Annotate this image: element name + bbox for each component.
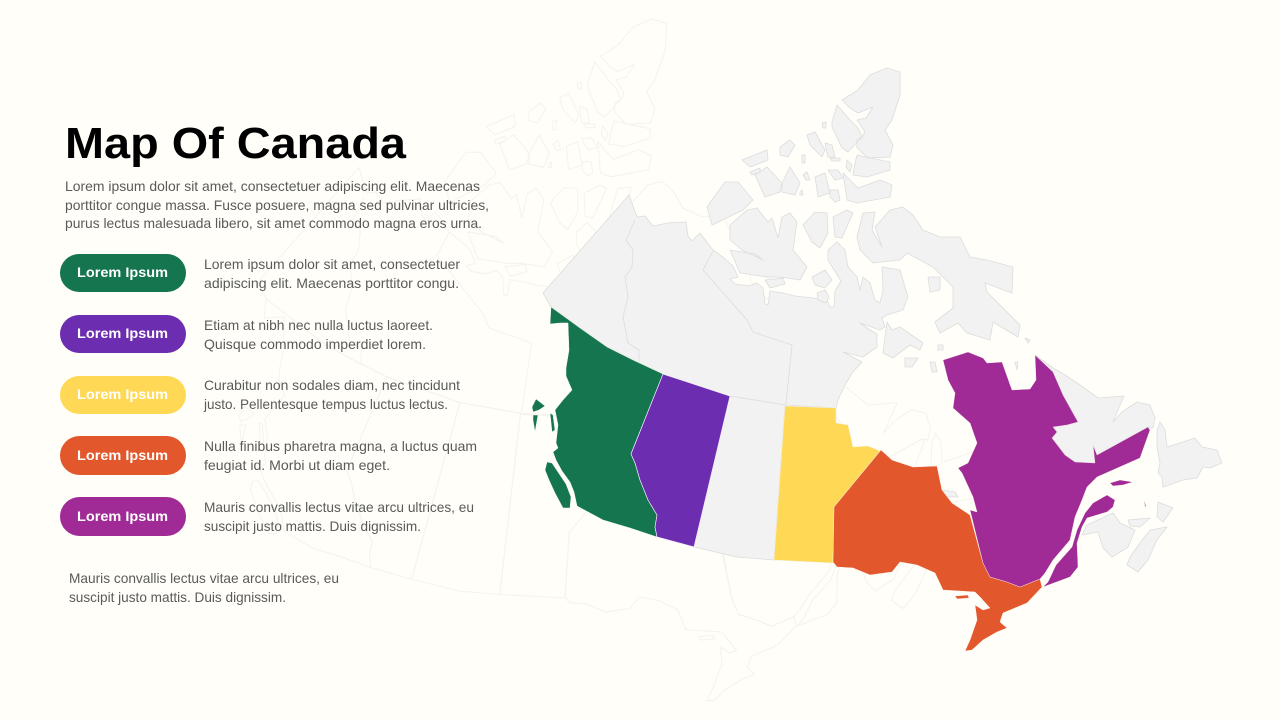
row 1: green pill and text: Lorem Ipsum: [77, 265, 168, 280]
northern territories and Arctic islands: [543, 68, 1030, 497]
title: Map Of Canada: [65, 119, 407, 168]
row 4: orange pill and text: feugiat id. Morbi ut diam eget.: [204, 457, 390, 473]
row 2: purple pill and text: Quisque commodo imperdiet lorem.: [204, 336, 426, 352]
row 2: purple pill and text: Etiam at nibh nec nulla luctus laoreet.: [204, 317, 433, 333]
British Columbia: [532, 307, 663, 537]
footer text: [69, 570, 339, 605]
Saskatchewan: [694, 396, 785, 560]
Quebec: [943, 352, 1150, 587]
row 3: yellow pill and text: Lorem Ipsum: [77, 387, 168, 402]
row 3: yellow pill and text: justo. Pellentesque tempus luctus lectus.: [203, 396, 448, 412]
intro paragraph: [65, 178, 489, 231]
intro paragraph: purus lectus malesuada libero, sit amet commodo magna eros urna.: [65, 215, 482, 231]
row 2: purple pill and text: Lorem Ipsum: [77, 326, 168, 341]
Newfoundland and Labrador, Maritimes: [1035, 355, 1222, 572]
background ghost map: [226, 19, 1024, 701]
row 5: magenta pill and text: suscipit justo mattis. Duis dignissim.: [204, 518, 421, 534]
row 1: green pill and text: Lorem ipsum dolor sit amet, consectetuer: [204, 256, 460, 272]
row 1: green pill and text: adipiscing elit. Maecenas porttitor congu.: [204, 275, 459, 291]
map of Canada: [532, 68, 1222, 651]
row 1: green pill and text: [60, 254, 460, 292]
row 4: orange pill and text: Nulla finibus pharetra magna, a luctus quam: [204, 438, 477, 454]
footer text: Mauris convallis lectus vitae arcu ultrices, eu: [69, 570, 339, 586]
row 2: purple pill and text: [60, 315, 433, 353]
footer text: suscipit justo mattis. Duis dignissim.: [69, 589, 286, 605]
Alberta: [631, 374, 730, 547]
Ontario: [833, 450, 1042, 651]
row 5: magenta pill and text: [60, 497, 474, 536]
row 4: orange pill and text: [60, 436, 477, 475]
row 5: magenta pill and text: Mauris convallis lectus vitae arcu ultrices, eu: [204, 499, 474, 515]
row 3: yellow pill and text: [60, 376, 460, 414]
row 4: orange pill and text: Lorem Ipsum: [77, 448, 168, 463]
row 3: yellow pill and text: Curabitur non sodales diam, nec tincidunt: [204, 377, 460, 393]
row 5: magenta pill and text: Lorem Ipsum: [77, 509, 168, 524]
intro paragraph: porttitor congue massa. Fusce posuere, magna sed pulvinar ultricies,: [65, 197, 489, 213]
intro paragraph: Lorem ipsum dolor sit amet, consectetuer adipiscing elit. Maecenas: [65, 178, 480, 194]
Manitoba: [774, 406, 880, 563]
